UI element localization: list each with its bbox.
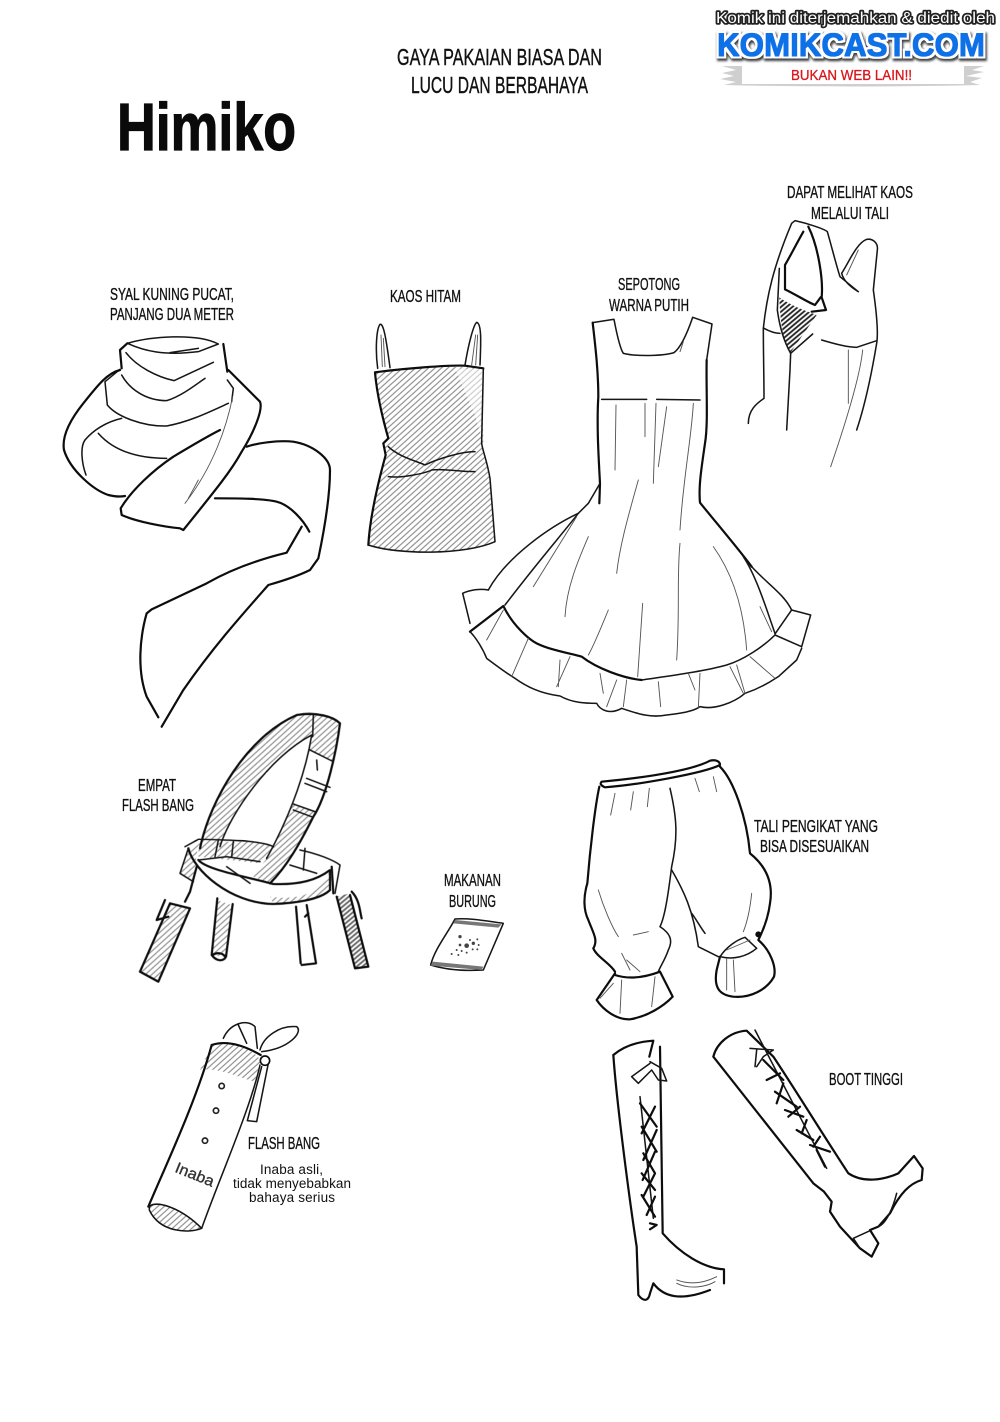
drawing: scarf xyxy=(64,337,330,727)
drawing: flash bang belt xyxy=(140,714,368,982)
heading xyxy=(397,44,602,98)
text: Inaba: Inaba xyxy=(173,1160,217,1191)
label: pants: TALI PENGIKAT YANG xyxy=(754,816,878,836)
label: shirt through strap: MELALUI TALI xyxy=(811,203,889,223)
drawing: black shirt xyxy=(368,322,495,552)
label: bird food xyxy=(444,870,501,911)
boot: right xyxy=(713,1030,923,1257)
logo: Komikcast xyxy=(716,10,995,86)
heading: GAYA PAKAIAN BIASA DAN xyxy=(397,44,602,70)
drawing: white dress xyxy=(463,317,811,716)
label: boots: BOOT TINGGI xyxy=(829,1069,903,1089)
label: bird food: BURUNG xyxy=(449,891,496,911)
label: scarf xyxy=(110,284,234,324)
drawing: flash bang xyxy=(148,1023,298,1231)
label: pants: BISA DISESUAIKAN xyxy=(760,836,869,856)
label: shirt through strap xyxy=(787,182,913,223)
label: white dress: SEPOTONG xyxy=(618,274,680,294)
logo: Komikcast: KOMIKCAST.COM xyxy=(717,27,985,63)
label: black shirt: KAOS HITAM xyxy=(390,286,461,306)
label: belt: FLASH BANG xyxy=(122,795,194,815)
heading: LUCU DAN BERBAHAYA xyxy=(411,72,588,98)
note: flash bang: Inaba asli, xyxy=(260,1162,323,1177)
note: flash bang: bahaya serius xyxy=(249,1190,335,1205)
note: flash bang xyxy=(233,1162,351,1205)
label: scarf: SYAL KUNING PUCAT, xyxy=(110,284,234,304)
drawing: high boots xyxy=(613,1030,923,1300)
logo: Komikcast: BUKAN WEB LAIN!! xyxy=(791,67,912,84)
drawing: pants xyxy=(584,760,775,1019)
drawing: shirt seen through strap xyxy=(748,221,877,467)
label: flash bang: FLASH BANG xyxy=(248,1133,320,1153)
label: bird food: MAKANAN xyxy=(444,870,501,890)
label: white dress: WARNA PUTIH xyxy=(609,295,689,315)
title: Himiko: Himiko xyxy=(117,90,296,165)
label: belt xyxy=(122,775,194,815)
note: flash bang: tidak menyebabkan xyxy=(233,1176,351,1191)
logo: Komikcast: Komik ini diterjemahkan & diedit oleh xyxy=(716,10,995,27)
label: white dress xyxy=(609,274,689,315)
label: shirt through strap: DAPAT MELIHAT KAOS xyxy=(787,182,913,202)
drawing: bird food packet xyxy=(431,919,503,970)
label: pants xyxy=(754,816,878,856)
label: scarf: PANJANG DUA METER xyxy=(110,304,234,324)
boot: left xyxy=(613,1041,724,1300)
label: belt: EMPAT xyxy=(138,775,176,795)
